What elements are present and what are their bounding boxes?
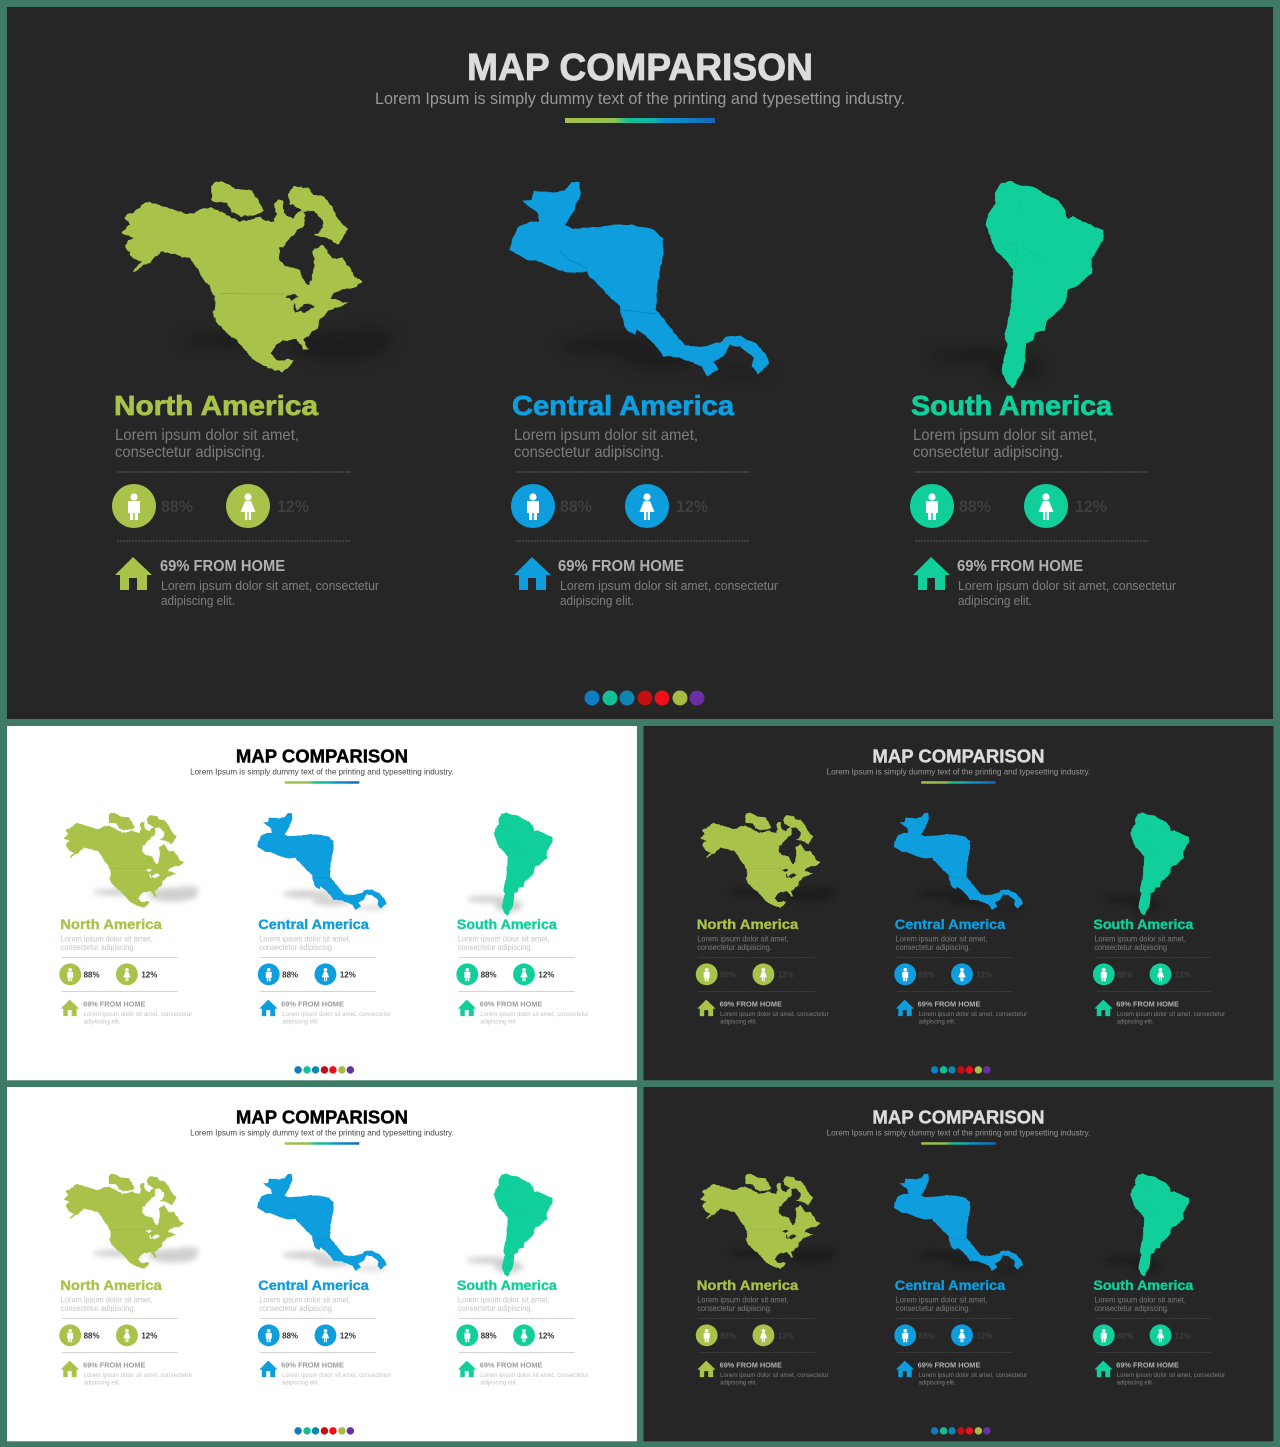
stat: female 12%: 12% [538, 1330, 555, 1340]
description [896, 934, 987, 952]
stat: male 88%: 88% [720, 1330, 737, 1340]
subtitle: Lorem Ipsum is simply dummy text of the printing and typesetting industry. [827, 766, 1090, 776]
stat: female 12%: 12% [778, 969, 794, 979]
map: North America [64, 812, 183, 907]
description [896, 1295, 987, 1313]
stat: female 12%: 12% [1175, 969, 1191, 979]
home stat [1116, 1000, 1225, 1026]
home stat [918, 1000, 1027, 1026]
stat: male 88%: 88% [1117, 1330, 1134, 1340]
stat: male 88%: 88% [481, 1330, 497, 1340]
gradient bar [285, 1142, 359, 1145]
column: North America [696, 916, 829, 1026]
heading: South America [457, 916, 557, 932]
pagination dots [931, 1066, 991, 1074]
description: Lorem ipsum dolor sit amet, [697, 934, 789, 943]
home stat [1116, 1361, 1225, 1387]
description [514, 427, 698, 461]
map: South America [494, 1173, 553, 1277]
heading: North America [60, 1277, 162, 1293]
heading: North America [60, 916, 162, 932]
description: Lorem ipsum dolor sit amet, [458, 1295, 549, 1304]
column: Central America [258, 1277, 391, 1387]
description [1094, 934, 1186, 952]
stat: female 12%: 12% [340, 969, 356, 979]
home stat: Lorem ipsum dolor sit amet, consectetur [958, 579, 1176, 593]
home stat [918, 1361, 1027, 1387]
stat: male 88%: 88% [1117, 969, 1134, 979]
gradient bar [565, 118, 715, 123]
title: MAP COMPARISON [467, 47, 813, 89]
heading: Central America [258, 1277, 369, 1293]
description: Lorem ipsum dolor sit amet, [259, 1295, 351, 1304]
subtitle: Lorem Ipsum is simply dummy text of the printing and typesetting industry. [190, 766, 454, 776]
description: consectetur adipiscing. [1094, 1304, 1169, 1313]
description [697, 934, 789, 952]
map: Central America [257, 1174, 387, 1271]
panel: small white slide, bottom left [7, 1087, 637, 1441]
description: Lorem ipsum dolor sit amet, [697, 1295, 789, 1304]
stat: female 12%: 12% [976, 1330, 993, 1340]
panel: large dark slide [7, 7, 1273, 719]
home stat [558, 558, 778, 608]
stat: male 88%: 88% [919, 1330, 935, 1340]
map shadows [180, 329, 1043, 381]
title: MAP COMPARISON [236, 1107, 408, 1128]
stat: male 88%: 88% [84, 1330, 100, 1340]
description [458, 1295, 549, 1313]
description: Lorem ipsum dolor sit amet, [896, 1295, 987, 1304]
home stat: Lorem ipsum dolor sit amet, consectetur [480, 1011, 589, 1018]
subtitle: Lorem Ipsum is simply dummy text of the printing and typesetting industry. [827, 1127, 1090, 1137]
description: Lorem ipsum dolor sit amet, [61, 1295, 152, 1304]
stat: male 88%: 88% [84, 969, 100, 979]
stat: female 12%: 12% [1175, 1330, 1191, 1340]
home stat: adipiscing elit. [161, 594, 235, 608]
icon: home [697, 1000, 716, 1016]
column: Central America [894, 1277, 1027, 1387]
description: Lorem ipsum dolor sit amet, [259, 934, 351, 943]
heading: North America [697, 1277, 799, 1293]
gradient bar [921, 1142, 996, 1145]
column: Central America [511, 390, 778, 608]
home stat: adipiscing elit. [1117, 1019, 1154, 1026]
home stat: 69% FROM HOME [281, 1000, 344, 1009]
column: Central America [894, 916, 1027, 1026]
column: South America [910, 390, 1176, 608]
icon: home [913, 557, 950, 590]
description [61, 1295, 152, 1313]
home stat: 69% FROM HOME [720, 1000, 782, 1009]
pagination dots [294, 1427, 354, 1435]
home stat: Lorem ipsum dolor sit amet, consectetur [560, 579, 778, 593]
heading: North America [114, 390, 318, 421]
home stat: adipiscing elit. [1117, 1380, 1154, 1387]
heading: South America [911, 390, 1112, 421]
map shadows [730, 1247, 1159, 1273]
home stat: adipiscing elit. [919, 1380, 956, 1387]
home stat: Lorem ipsum dolor sit amet, consectetur [282, 1011, 391, 1018]
description: consectetur adipiscing. [896, 1304, 970, 1313]
map shadows [730, 886, 1159, 912]
stat: male 88%: 88% [919, 969, 935, 979]
home stat: 69% FROM HOME [1116, 1361, 1179, 1370]
map: South America [1131, 812, 1189, 916]
stat: female 12%: 12% [340, 1330, 356, 1340]
home stat: Lorem ipsum dolor sit amet, consectetur [919, 1372, 1027, 1379]
home stat [160, 558, 379, 608]
home stat: 69% FROM HOME [720, 1361, 782, 1370]
stat: female 12%: 12% [976, 969, 993, 979]
icon: home [514, 557, 551, 590]
stat: female 12%: 12% [1075, 497, 1107, 516]
icon: home [115, 557, 152, 590]
icon: home [458, 1000, 476, 1016]
icon: home [61, 1361, 79, 1377]
stat: female 12%: 12% [277, 497, 309, 516]
map: South America [986, 181, 1103, 388]
home stat: 69% FROM HOME [558, 558, 684, 575]
description: consectetur adipiscing. [913, 444, 1063, 461]
map: Central America [257, 813, 387, 910]
description [259, 934, 351, 952]
description: Lorem ipsum dolor sit amet, [458, 934, 549, 943]
column: North America [59, 1277, 192, 1387]
column: North America [696, 1277, 829, 1387]
stat: female 12% [625, 484, 708, 528]
heading: Central America [895, 1277, 1006, 1293]
home stat: adipiscing elit. [560, 594, 634, 608]
home stat: 69% FROM HOME [957, 558, 1083, 575]
description: Lorem ipsum dolor sit amet, [115, 427, 299, 444]
description: Lorem ipsum dolor sit amet, [1094, 934, 1186, 943]
subtitle: Lorem Ipsum is simply dummy text of the printing and typesetting industry. [375, 89, 905, 108]
home stat: Lorem ipsum dolor sit amet, consectetur [919, 1011, 1027, 1018]
panel: small dark slide, top right [644, 726, 1273, 1080]
stat: male 88%: 88% [282, 1330, 299, 1340]
column: South America [1093, 1277, 1225, 1387]
stat: female 12%: 12% [538, 969, 555, 979]
pagination dots [584, 690, 704, 706]
home stat: 69% FROM HOME [1116, 1000, 1179, 1009]
map: South America [494, 812, 553, 916]
description: consectetur adipiscing. [61, 1304, 135, 1313]
description [259, 1295, 351, 1313]
title: MAP COMPARISON [872, 1107, 1045, 1128]
icon: home [259, 1361, 278, 1377]
map: Central America [894, 1174, 1023, 1271]
home stat: 69% FROM HOME [281, 1361, 344, 1370]
map: North America [122, 181, 362, 372]
description: consectetur adipiscing. [259, 1304, 334, 1313]
description: Lorem ipsum dolor sit amet, [1094, 1295, 1186, 1304]
icon: home [61, 1000, 79, 1016]
heading: South America [1093, 916, 1194, 932]
heading: South America [457, 1277, 557, 1293]
home stat: Lorem ipsum dolor sit amet, consectetur [84, 1011, 192, 1018]
description [61, 934, 152, 952]
home stat: adipiscing elit. [720, 1380, 757, 1387]
pagination dots [931, 1427, 991, 1435]
home stat: 69% FROM HOME [480, 1000, 542, 1009]
stat: female 12% [226, 484, 309, 528]
home stat: adipiscing elit. [919, 1019, 956, 1026]
description [458, 934, 549, 952]
stat: male 88% [910, 484, 991, 528]
panel: small dark slide, bottom right [644, 1087, 1273, 1441]
home stat: adipiscing elit. [84, 1019, 121, 1026]
description: Lorem ipsum dolor sit amet, [896, 934, 987, 943]
home stat: Lorem ipsum dolor sit amet, consectetur [282, 1372, 391, 1379]
home stat: 69% FROM HOME [160, 558, 285, 575]
description: consectetur adipiscing. [697, 1304, 772, 1313]
stat: female 12% [1024, 484, 1107, 528]
home stat [83, 1361, 192, 1387]
home stat: adipiscing elit. [84, 1380, 121, 1387]
stat: male 88% [112, 484, 193, 528]
home stat: adipiscing elit. [480, 1019, 517, 1026]
gradient bar [285, 781, 359, 784]
map: Central America [510, 182, 770, 376]
column: South America [456, 916, 589, 1026]
description: consectetur adipiscing. [896, 943, 970, 952]
pagination dots [294, 1066, 354, 1074]
description [1094, 1295, 1186, 1313]
stat: male 88%: 88% [161, 497, 193, 516]
icon: home [458, 1361, 476, 1377]
home stat: Lorem ipsum dolor sit amet, consectetur [720, 1011, 829, 1018]
description: Lorem ipsum dolor sit amet, [514, 427, 698, 444]
title: MAP COMPARISON [236, 746, 408, 767]
map: North America [701, 812, 820, 907]
description: consectetur adipiscing. [697, 943, 772, 952]
stat: male 88%: 88% [481, 969, 497, 979]
heading: Central America [258, 916, 369, 932]
home stat [480, 1361, 589, 1387]
home stat: adipiscing elit. [282, 1019, 319, 1026]
home stat [281, 1000, 391, 1026]
stat: male 88% [511, 484, 592, 528]
home stat: adipiscing elit. [480, 1380, 517, 1387]
description: Lorem ipsum dolor sit amet, [61, 934, 152, 943]
home stat: Lorem ipsum dolor sit amet, consectetur [1117, 1011, 1225, 1018]
home stat: adipiscing elit. [958, 594, 1032, 608]
home stat: Lorem ipsum dolor sit amet, consectetur [161, 579, 379, 593]
column: South America [456, 1277, 589, 1387]
description: consectetur adipiscing. [115, 444, 265, 461]
description: consectetur adipiscing. [458, 1304, 532, 1313]
home stat [83, 1000, 192, 1026]
stat: female 12%: 12% [676, 497, 708, 516]
home stat: adipiscing elit. [720, 1019, 757, 1026]
description: Lorem ipsum dolor sit amet, [913, 427, 1097, 444]
heading: Central America [895, 916, 1006, 932]
stat: female 12%: 12% [778, 1330, 794, 1340]
stat: female 12%: 12% [141, 1330, 158, 1340]
icon: home [896, 1361, 914, 1377]
gradient bar [921, 781, 996, 784]
map shadows [93, 1247, 523, 1273]
home stat [720, 1000, 829, 1026]
map: North America [701, 1173, 820, 1268]
home stat: 69% FROM HOME [83, 1361, 145, 1370]
icon: home [697, 1361, 716, 1377]
map: Central America [894, 813, 1023, 910]
heading: Central America [512, 390, 734, 421]
column: North America [112, 390, 379, 608]
description [115, 427, 299, 461]
description: consectetur adipiscing. [514, 444, 664, 461]
home stat [720, 1361, 829, 1387]
stat: male 88%: 88% [560, 497, 592, 516]
description: consectetur adipiscing. [259, 943, 334, 952]
panel: small white slide, top left [7, 726, 637, 1080]
home stat: adipiscing elit. [282, 1380, 319, 1387]
column: North America [59, 916, 192, 1026]
home stat: Lorem ipsum dolor sit amet, consectetur [84, 1372, 192, 1379]
home stat: 69% FROM HOME [83, 1000, 145, 1009]
title: MAP COMPARISON [872, 746, 1045, 767]
stat: male 88%: 88% [959, 497, 991, 516]
stat: male 88%: 88% [282, 969, 299, 979]
stat: male 88%: 88% [720, 969, 737, 979]
home stat [281, 1361, 391, 1387]
description [913, 427, 1097, 461]
description: consectetur adipiscing. [458, 943, 532, 952]
description: consectetur adipiscing. [1094, 943, 1169, 952]
heading: North America [697, 916, 799, 932]
description: consectetur adipiscing. [61, 943, 135, 952]
subtitle: Lorem Ipsum is simply dummy text of the printing and typesetting industry. [190, 1127, 454, 1137]
home stat: Lorem ipsum dolor sit amet, consectetur [1117, 1372, 1225, 1379]
home stat: Lorem ipsum dolor sit amet, consectetur [720, 1372, 829, 1379]
map shadows [93, 886, 523, 912]
column: South America [1093, 916, 1225, 1026]
map: South America [1131, 1173, 1189, 1277]
description [697, 1295, 789, 1313]
home stat [957, 558, 1176, 608]
icon: home [1094, 1000, 1113, 1016]
home stat: 69% FROM HOME [480, 1361, 542, 1370]
home stat [480, 1000, 589, 1026]
icon: home [896, 1000, 914, 1016]
home stat: 69% FROM HOME [918, 1000, 980, 1009]
column: Central America [258, 916, 391, 1026]
home stat: Lorem ipsum dolor sit amet, consectetur [480, 1372, 589, 1379]
icon: home [259, 1000, 278, 1016]
icon: home [1094, 1361, 1113, 1377]
home stat: 69% FROM HOME [918, 1361, 980, 1370]
map: North America [64, 1173, 183, 1268]
heading: South America [1093, 1277, 1194, 1293]
stat: female 12%: 12% [141, 969, 158, 979]
